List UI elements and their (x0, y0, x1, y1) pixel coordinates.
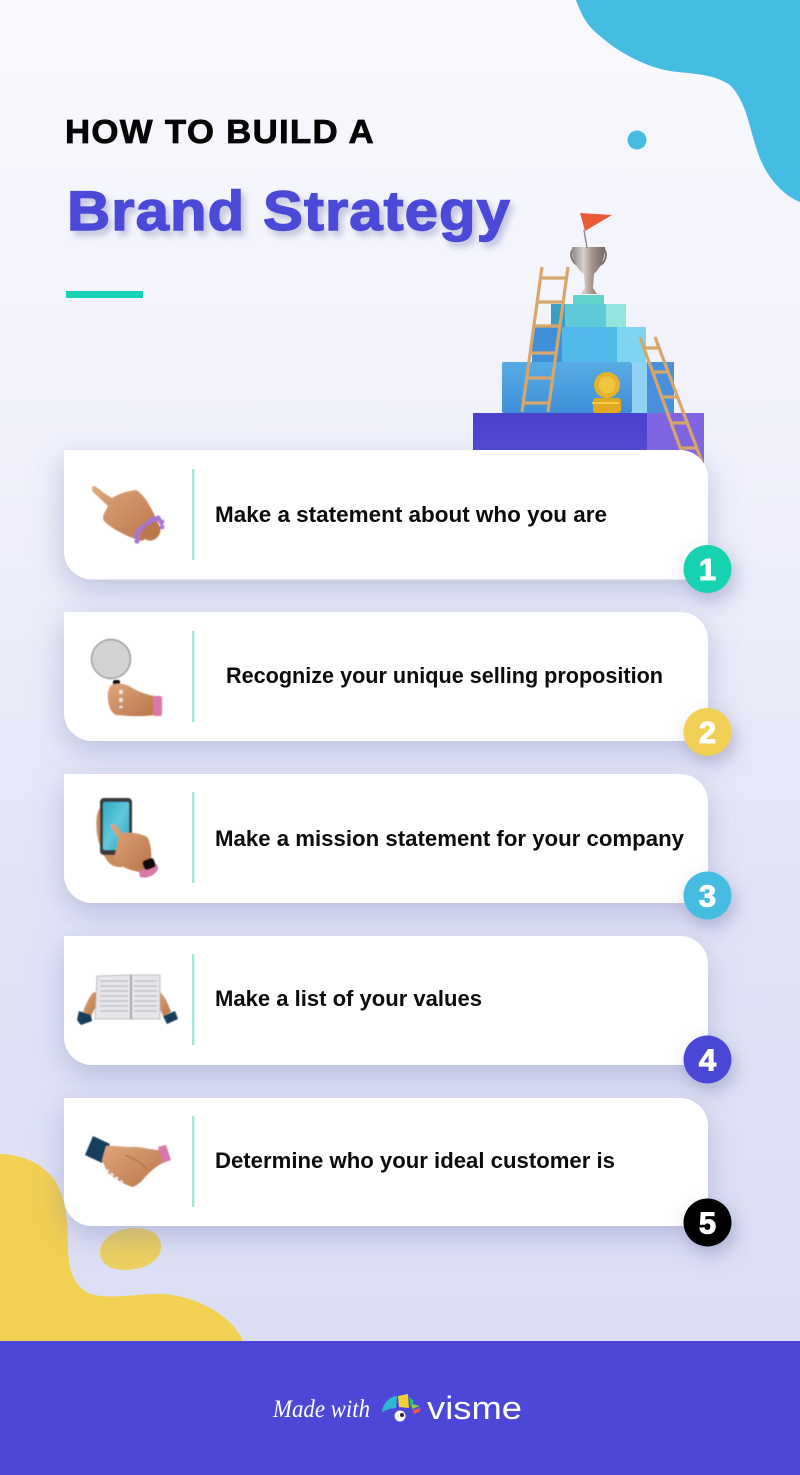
step text: Make a list of your values (215, 986, 482, 1011)
trophy (571, 247, 606, 294)
flag (580, 213, 612, 248)
divider (192, 1116, 194, 1207)
step text: Make a statement about who you are (215, 502, 607, 527)
card panel (64, 774, 708, 903)
visme wordmark: visme (427, 1390, 522, 1426)
right ladder (640, 337, 702, 462)
teal block (551, 304, 626, 327)
step text: Make a mission statement for your company (215, 826, 685, 851)
gold coins (592, 372, 621, 413)
left ladder (522, 267, 568, 412)
divider (192, 631, 194, 722)
icon: hand with phone (96, 798, 158, 878)
decorative blob: blue top right (576, 0, 800, 202)
step card 4 (64, 936, 732, 1084)
number badge 1 (684, 545, 732, 593)
number badge 2: 2 (699, 715, 716, 750)
decorative blob: yellow bottom left (0, 1154, 243, 1341)
number badge 2 (684, 708, 732, 756)
divider (192, 469, 194, 560)
number badge 5 (684, 1198, 732, 1246)
card panel (64, 612, 708, 741)
step card 2 (64, 612, 732, 756)
card panel (64, 1098, 708, 1226)
decorative dot: blue (628, 130, 646, 150)
heading: brand strategy: Brand Strategy (67, 179, 511, 242)
divider (192, 954, 194, 1045)
purple base block (473, 413, 704, 465)
heading: how to build a: HOW TO BUILD A (65, 114, 375, 151)
number badge 1: 1 (699, 552, 716, 587)
small teal pedestal (573, 295, 604, 304)
icon: pointing hand (92, 486, 164, 544)
number badge 4 (684, 1036, 732, 1084)
step card 1 (64, 450, 732, 593)
icon: hands holding open book (77, 975, 178, 1025)
accent bar under heading (66, 291, 143, 298)
number badge 4: 4 (699, 1042, 717, 1078)
step card 5 (64, 1098, 732, 1246)
card panel (64, 936, 708, 1065)
step text: Determine who your ideal customer is (215, 1148, 615, 1173)
icon: handshake (85, 1136, 171, 1187)
footer band (0, 1341, 800, 1475)
middle blue block (532, 327, 646, 362)
divider (192, 792, 194, 883)
illustration: podium with trophy and ladders (473, 213, 704, 465)
card panel (64, 450, 708, 580)
icon: hand with magnifying glass (92, 640, 162, 716)
step card 3 (64, 774, 732, 920)
number badge 5: 5 (699, 1206, 716, 1240)
number badge 3: 3 (699, 878, 716, 914)
visme logo mark (382, 1394, 421, 1422)
number badge 3 (684, 872, 732, 920)
decorative blob: small yellow (100, 1228, 161, 1270)
big blue block (502, 362, 674, 413)
step text: Recognize your unique selling proposition (226, 663, 663, 688)
made with label: Made with (272, 1396, 370, 1423)
